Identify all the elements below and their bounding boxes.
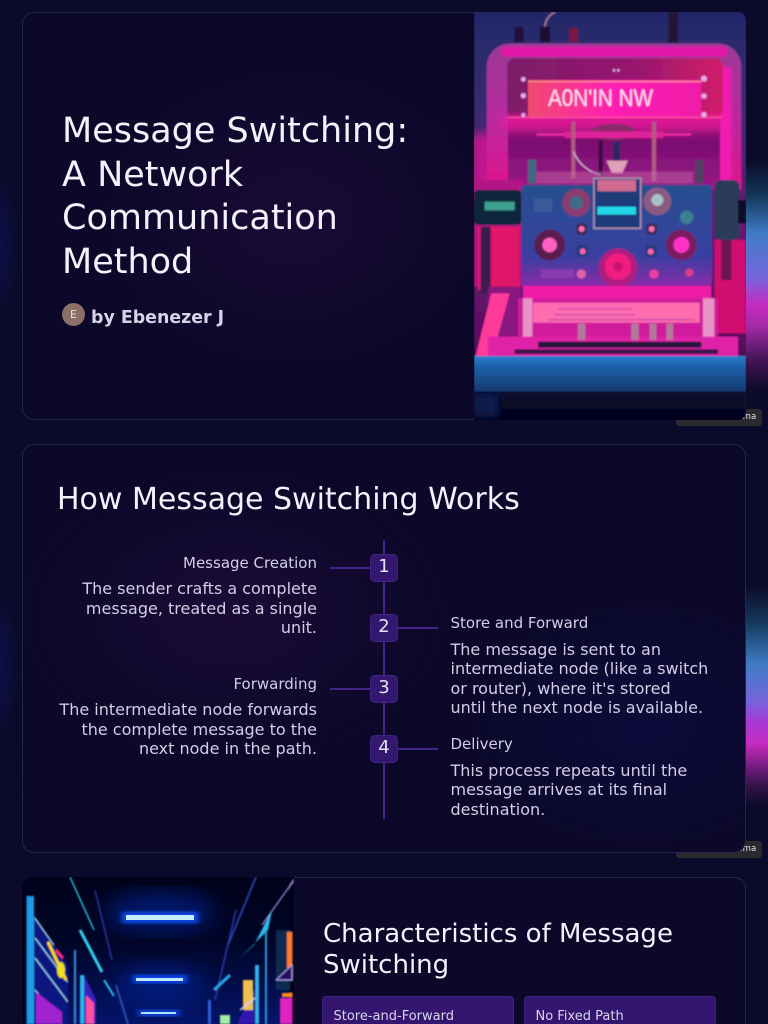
- card: store-and-forward: Store-and-Forward: [334, 1009, 454, 1024]
- step 3 text: next node in the path.: [139, 739, 317, 758]
- card: store-and-forward: [322, 996, 514, 1024]
- heading: characteristics of message switching: Characteristics of Message: [323, 918, 673, 948]
- housing: [487, 43, 741, 190]
- step 2: store and forward: [450, 614, 708, 717]
- step 2 text: or router), where it's stored: [450, 678, 671, 698]
- step 2 label: Store and Forward: [450, 614, 588, 632]
- step 4: delivery: [450, 735, 687, 818]
- card: no fixed path: [524, 996, 716, 1024]
- right server rack: [208, 877, 294, 1024]
- step 1 text: [82, 579, 317, 637]
- machine base: [474, 356, 746, 392]
- step number 1: 1: [378, 556, 390, 577]
- step 3 text: The intermediate node forwards: [59, 700, 317, 719]
- connector 3: [330, 688, 370, 690]
- step 1 text: The sender crafts a complete: [82, 579, 317, 598]
- connector 2: [398, 627, 438, 629]
- step 2 text: until the next node is available.: [450, 698, 703, 717]
- timeline spine: [383, 540, 385, 819]
- step 2 text: The message is sent to an: [450, 640, 661, 658]
- step 1 text: unit.: [281, 618, 317, 637]
- step 1 text: message, treated as a single: [86, 598, 317, 618]
- step number 4: 4: [378, 737, 390, 758]
- display text: A0N'IN NW: [548, 85, 653, 112]
- side glow: left upper: [0, 170, 20, 320]
- step 1 label: Message Creation: [183, 554, 317, 572]
- step number 3: 3: [378, 677, 390, 698]
- step 4 label: Delivery: [450, 735, 513, 753]
- step 4 text: message arrives at its final: [450, 780, 667, 799]
- title: Communication: [62, 198, 338, 238]
- step number 2: [370, 614, 398, 642]
- step 3 text: [59, 700, 317, 758]
- badge: made with gamma upper: [676, 409, 762, 426]
- side glow: left lower: [0, 590, 20, 740]
- side glow: right lower: [746, 585, 768, 805]
- title: Method: [62, 242, 193, 282]
- step 3 label: Forwarding: [233, 675, 317, 693]
- central mechanism: [528, 122, 703, 183]
- title: [62, 111, 408, 282]
- step 2 text: [450, 640, 708, 717]
- step 4 text: [450, 760, 687, 818]
- step number 4: [370, 735, 398, 763]
- blue drum: [521, 185, 712, 287]
- dials: [534, 187, 697, 287]
- badge: made with gamma upper: Made with Gamma: [676, 412, 756, 422]
- corridor backdrop: [22, 877, 294, 1024]
- title: A Network: [62, 155, 243, 195]
- left server rack: [22, 877, 128, 1024]
- side glow: right upper: [746, 160, 768, 390]
- panel: title card: [22, 12, 746, 420]
- cables and knobs: [515, 12, 678, 43]
- step 3 text: the complete message to the: [81, 720, 317, 738]
- icon: author avatar: [62, 303, 85, 326]
- panel: how it works: [22, 444, 746, 853]
- side wheels: [474, 180, 746, 360]
- step 4 text: This process repeats until the: [450, 760, 687, 780]
- badge: made with gamma lower: [676, 841, 762, 858]
- panel: characteristics: [22, 877, 746, 1024]
- step 2 text: intermediate node (like a switch: [450, 659, 708, 678]
- backdrop: [474, 12, 746, 357]
- step 1: message creation: [82, 554, 317, 637]
- author byline: by Ebenezer J: [91, 308, 224, 328]
- step 3: forwarding: [59, 675, 317, 758]
- step number 3: [370, 675, 398, 703]
- heading: characteristics of message switching: [323, 918, 673, 980]
- step number 2: 2: [378, 616, 390, 637]
- lower pink panel: [488, 286, 738, 360]
- connector 1: [330, 567, 370, 569]
- center window: [594, 178, 641, 228]
- title: Message Switching:: [62, 111, 408, 151]
- step number 1: [370, 554, 398, 582]
- heading: characteristics of message switching: Switching: [323, 950, 449, 980]
- connector 4: [398, 748, 438, 750]
- image: neon server corridor: [22, 877, 294, 1024]
- ceiling lights: [122, 912, 198, 1016]
- badge: made with gamma lower: Made with Gamma: [676, 844, 756, 854]
- heading: how message switching works: How Message Switching Works: [57, 482, 520, 517]
- step 4 text: destination.: [450, 800, 545, 818]
- icon: author avatar: E: [70, 308, 77, 321]
- card: no fixed path: No Fixed Path: [536, 1009, 624, 1024]
- image: neon message switching machine: [474, 12, 746, 420]
- glowing display: [528, 80, 701, 117]
